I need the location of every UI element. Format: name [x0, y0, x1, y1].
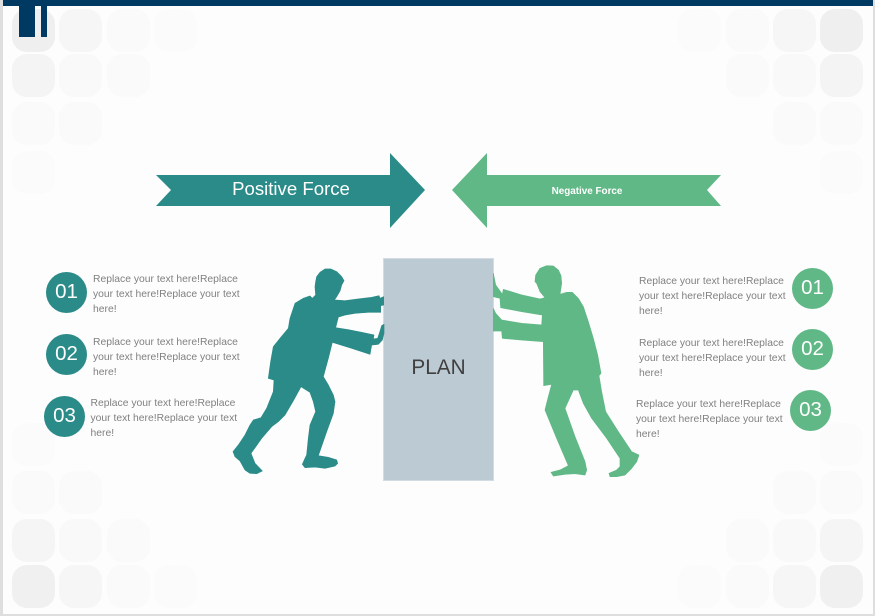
plan box: PLAN — [411, 356, 466, 379]
text 01: Replace your text here!Replace your text here!Replace your text here! — [639, 276, 786, 317]
badge 03: 03 — [799, 398, 822, 421]
background tiles: bottom left — [12, 565, 55, 608]
arrow: negative force — [452, 153, 721, 228]
background tiles: bottom right — [820, 565, 863, 608]
top bar — [3, 0, 873, 6]
left item 02 — [46, 334, 240, 378]
text 03: Replace your text here!Replace your text here!Replace your text here! — [90, 398, 237, 439]
arrow: negative force: Negative Force — [552, 186, 623, 197]
badge 02 — [46, 334, 87, 375]
badge 01: 01 — [55, 280, 78, 303]
left item 01 — [46, 272, 240, 315]
badge 01 — [46, 272, 87, 313]
right item 01 — [639, 268, 833, 317]
plan box — [383, 258, 494, 481]
arrow: positive force: Positive Force — [232, 178, 350, 199]
text 03: Replace your text here!Replace your text here!Replace your text here! — [636, 399, 783, 440]
background tiles: top right — [820, 9, 863, 97]
text 02: Replace your text here!Replace your text here!Replace your text here! — [93, 337, 240, 378]
figure: teal person pushing — [232, 268, 384, 474]
badge 02 — [792, 329, 833, 370]
text 02: Replace your text here!Replace your text here!Replace your text here! — [639, 338, 786, 379]
badge 03 — [44, 396, 85, 437]
badge 01: 01 — [801, 276, 824, 299]
background tiles: top left — [12, 9, 55, 97]
badge 01 — [792, 268, 833, 309]
right item 03 — [636, 390, 831, 440]
left item 03 — [44, 396, 238, 439]
badge 02: 02 — [55, 342, 78, 365]
badge 03: 03 — [53, 404, 76, 427]
corner bookmark tabs — [19, 6, 47, 37]
badge 03 — [790, 390, 831, 431]
arrow: positive force — [156, 153, 425, 228]
figure: green person pushing — [493, 265, 640, 477]
right item 02 — [639, 329, 833, 379]
badge 02: 02 — [801, 337, 824, 360]
text 01: Replace your text here!Replace your text here!Replace your text here! — [93, 274, 240, 315]
